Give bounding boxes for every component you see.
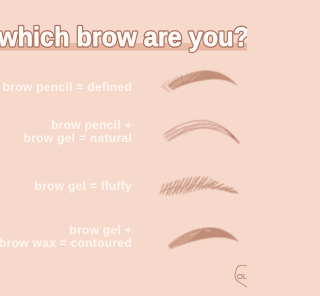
eyebrow: fluffy	[160, 176, 238, 195]
eyebrow: contoured	[167, 227, 239, 250]
label: brow wax = contoured: brow wax = contoured	[0, 236, 132, 250]
label: brow gel = fluffy: brow gel = fluffy	[35, 179, 132, 193]
logo	[235, 265, 253, 287]
label: brow gel +: brow gel +	[69, 223, 132, 237]
eyebrow: defined	[161, 70, 238, 92]
eyebrow: natural	[163, 120, 239, 143]
label: brow pencil +: brow pencil +	[51, 118, 132, 132]
label: brow gel = natural: brow gel = natural	[24, 131, 132, 145]
title highlight band	[0, 43, 247, 50]
label: brow pencil = defined: brow pencil = defined	[3, 80, 132, 94]
